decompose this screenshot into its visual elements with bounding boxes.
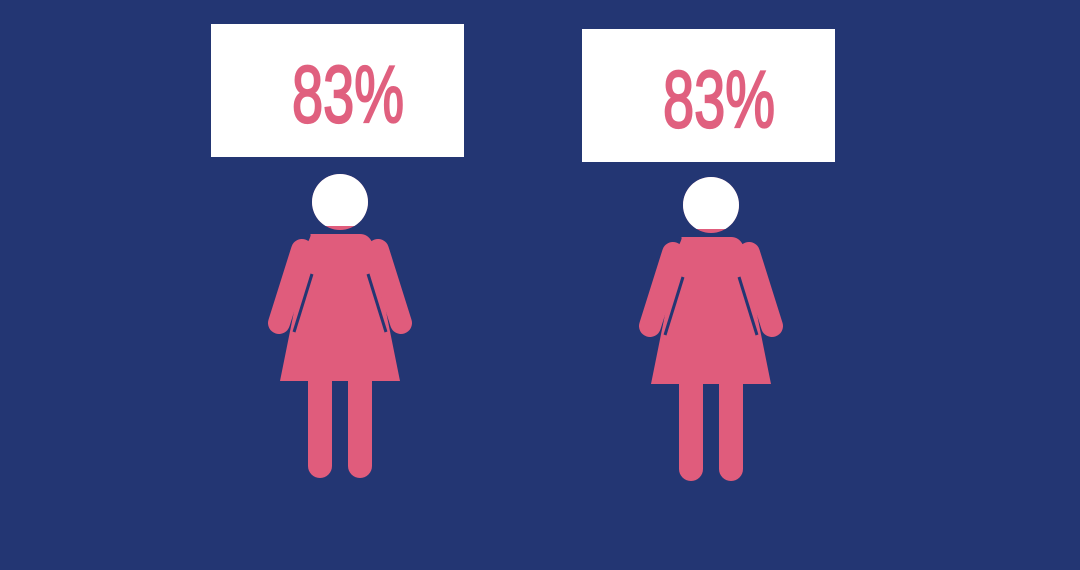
callout: 83% box 1: 83% bbox=[292, 50, 404, 140]
callout: 83% box 2 bbox=[582, 29, 835, 162]
icon: woman 2 bbox=[650, 177, 772, 481]
panel: figure 2 bbox=[582, 29, 835, 481]
callout: 83% box 1 bbox=[211, 24, 464, 157]
panel: figure 1 bbox=[211, 24, 464, 478]
callout: 83% box 2: 83% bbox=[663, 55, 775, 145]
icon: woman 1 bbox=[279, 174, 401, 478]
